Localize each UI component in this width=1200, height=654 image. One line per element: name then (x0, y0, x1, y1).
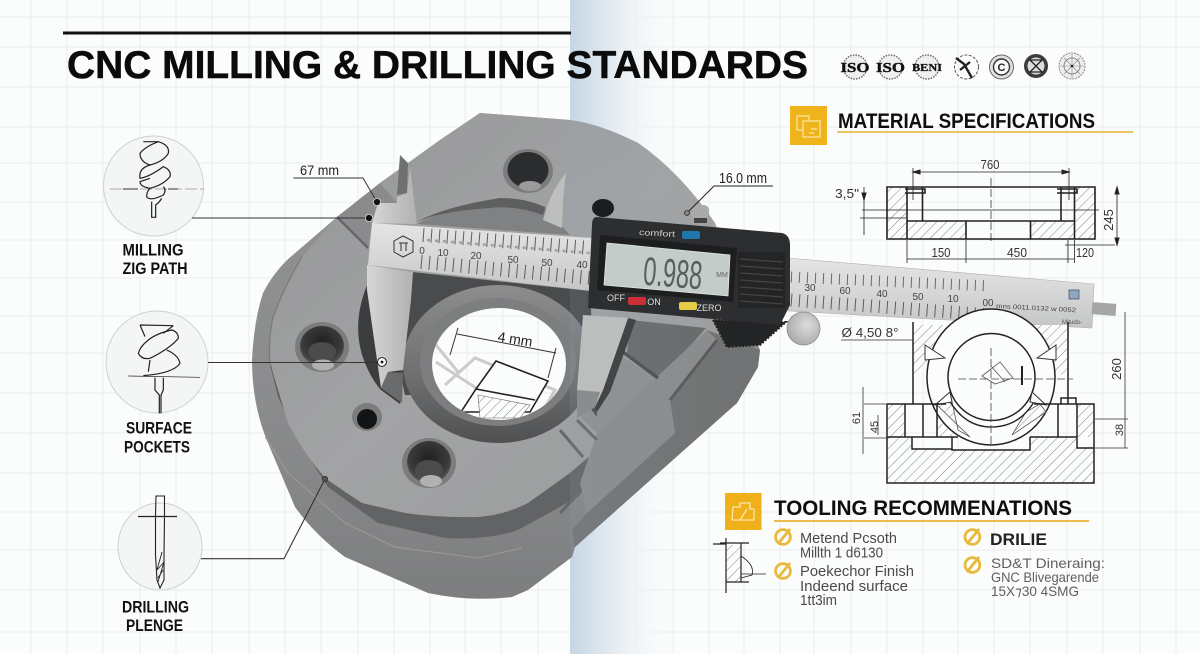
dark screw (592, 199, 614, 217)
small section drawing (713, 538, 766, 593)
dimension: 4 mm: 4 mm (497, 328, 534, 350)
upper fixed jaw (372, 167, 417, 224)
check: drill (965, 529, 980, 544)
surface label: POCKETS (124, 438, 190, 456)
hatched upper block areas (887, 325, 1094, 437)
LCD reading: 0.988 (642, 250, 704, 298)
check: drill spec (965, 557, 980, 572)
scale numbers (419, 246, 994, 309)
milling centerline (110, 188, 204, 190)
scale numbers: 40 (576, 260, 588, 271)
part outer wall (252, 113, 760, 599)
tool text: pocket: Poekechor Finish (800, 564, 914, 580)
drilling illustration circle (118, 503, 202, 590)
operation: milling zig path (104, 136, 373, 278)
callout: 16.0 mm: 16.0 mm (719, 171, 767, 187)
drilling bit icon (138, 496, 177, 588)
hole: left (295, 322, 349, 372)
operation: surface pockets (106, 311, 386, 456)
certification badges (840, 53, 1085, 79)
centerline (990, 178, 992, 241)
title: CNC MILLING & DRILLING STANDARDS (67, 44, 808, 87)
recess floor between jaws (417, 201, 570, 235)
badge: tool seal (954, 55, 978, 79)
right slab (580, 330, 717, 513)
check: milling (776, 529, 790, 544)
right slab slot (670, 340, 717, 400)
callout: 16.0 mm (685, 171, 773, 215)
hole: small (352, 403, 382, 431)
tool text: pocket: 1tt3im (800, 593, 837, 609)
silver thumb screw (691, 205, 709, 223)
dimension labels: 245 (1101, 209, 1116, 231)
section: material specifications (790, 106, 1133, 263)
scale numbers: 60 (839, 286, 851, 297)
milling label: MILLING (122, 242, 184, 260)
tooling heading: TOOLING RECOMMENATIONS (774, 497, 1072, 520)
beam logo (394, 236, 413, 257)
scale numbers: 50 (912, 292, 924, 303)
scale brand print: Mitudo- (1062, 320, 1082, 326)
blue tinted right panel edge (570, 0, 685, 654)
display grille (738, 252, 785, 308)
lower tick marks left (421, 262, 590, 278)
badge: ISO (840, 55, 870, 79)
depth rod (1092, 302, 1116, 316)
dimension labels: 450 (1007, 245, 1027, 260)
scale numbers: 30 (804, 283, 816, 294)
title rule (63, 32, 571, 34)
milling leader (192, 214, 373, 222)
section outlines (887, 187, 1095, 239)
badge: target seal (1059, 53, 1085, 79)
badge: BENI: BENI (912, 62, 942, 74)
upper tick marks left (423, 235, 590, 248)
upper tick marks right (791, 277, 990, 286)
tooling icon (725, 493, 762, 530)
surface illustration circle (106, 311, 208, 413)
material underline (837, 131, 1133, 133)
surface leader (208, 358, 386, 366)
tool text: pocket: Indeend surface (800, 579, 908, 595)
drilling label: PLENGE (126, 617, 183, 635)
dimension lines (860, 168, 1117, 263)
check: pocket (776, 563, 790, 578)
upper dots row left (427, 240, 590, 253)
surface label: SURFACE (126, 420, 192, 438)
operation: drilling plenge (118, 476, 328, 635)
upper moving jaw (543, 173, 566, 228)
scale small print: mns 0011.0132 w 0052 (996, 303, 1077, 314)
badge: ISO: ISO (840, 61, 870, 76)
drill subheading: DRILIE (990, 530, 1047, 549)
yellow button (679, 302, 697, 310)
lower jaw base shade (381, 372, 403, 403)
ring bevel (420, 298, 576, 426)
surface label (124, 420, 192, 456)
drilling label: DRILLING (122, 598, 189, 616)
upper fixed jaw blade (397, 155, 408, 195)
scale numbers: 10 (947, 294, 959, 305)
dark block (400, 272, 597, 417)
tooling underline (774, 520, 1089, 522)
hole: lower (402, 438, 456, 488)
block dimension labels: 45 (869, 421, 881, 433)
milling label (122, 242, 188, 278)
section: tooling recommendations (713, 493, 1105, 609)
tool text: drill spec (991, 555, 1105, 599)
dimension labels: 3,5" (835, 186, 859, 201)
right outer block (572, 330, 760, 547)
scale numbers: 20 (470, 251, 482, 262)
dimension labels: 150 (932, 245, 950, 260)
thumb wheel (787, 312, 820, 345)
right recess floor light (580, 357, 660, 433)
recess arc band (417, 198, 545, 222)
surface drill icon (128, 325, 200, 413)
drilling label (122, 598, 189, 635)
material heading: MATERIAL SPECIFICATIONS (838, 109, 1095, 133)
display bezel (597, 235, 737, 302)
tint over part (570, 289, 634, 546)
digital caliper (367, 155, 1116, 418)
chamfer groove (337, 217, 368, 248)
block dimension labels: Ø 4,50 8° (842, 325, 898, 340)
display body (588, 217, 790, 325)
top section drawing (860, 168, 1119, 263)
badge: X seal (1024, 54, 1048, 78)
block dimension labels: 61 (851, 412, 863, 424)
dimension labels: 760 (980, 157, 1000, 172)
scale numbers: 50 (507, 255, 519, 266)
badge: C seal (990, 55, 1014, 79)
hatched base (887, 437, 1094, 483)
scale numbers: 0 (419, 246, 425, 257)
arrows (862, 170, 1119, 245)
left chamfer facet (337, 183, 397, 248)
diagonal dark bars (560, 420, 597, 513)
tool text: milling (800, 531, 897, 562)
drawing seen through hole (433, 308, 565, 420)
tool text: drill spec: GNC Blivegarende (991, 569, 1099, 585)
block dimension labels (842, 325, 1126, 436)
top face (269, 113, 740, 517)
lower moving jaw edge (595, 318, 636, 412)
milling drill icon (140, 142, 170, 217)
dimension labels (835, 157, 1116, 260)
LCD screen (604, 243, 730, 296)
ring (403, 285, 593, 443)
zero label: ZERO (696, 303, 722, 313)
hatched section (887, 187, 1095, 239)
tool text: drill spec: SD&T Dineraing: (991, 555, 1105, 571)
tool text: milling: Metend Pcsoth (800, 531, 897, 547)
block dimension labels: 38 (1114, 424, 1126, 436)
left column: operations (104, 136, 386, 635)
scale numbers: 10 (437, 248, 449, 259)
lower moving jaw (577, 315, 628, 418)
badge: BENI (912, 55, 942, 79)
scale brand mark (1069, 290, 1079, 299)
block outlines (887, 398, 1094, 483)
badge: ISO second: ISO (876, 61, 905, 76)
block dimension labels: 260 (1109, 358, 1124, 380)
callout: 67 mm (294, 162, 381, 206)
display brand: comfort (639, 227, 676, 239)
main scale beam right (788, 258, 1094, 328)
through hole (432, 308, 566, 420)
right slab dark bar (623, 352, 658, 378)
on label: ON (647, 297, 661, 307)
dark recess left of lower jaw (358, 283, 410, 404)
bearing housing (913, 309, 1073, 445)
callout: 67 mm: 67 mm (300, 162, 339, 178)
milling label: ZIG PATH (122, 260, 188, 278)
tool text: pocket (800, 564, 914, 609)
center ring with through-hole (400, 272, 597, 443)
scale numbers: 00 (982, 298, 994, 309)
material icon (790, 106, 827, 145)
off label: OFF (607, 293, 625, 303)
scale numbers: 50 (541, 258, 553, 269)
red button (628, 297, 646, 305)
drilling leader (201, 476, 328, 559)
lower moving jaw foot (577, 390, 600, 418)
lower fixed jaw (367, 265, 413, 388)
right recess floor dark (627, 320, 706, 380)
knurled drive (713, 320, 786, 347)
blue button (682, 231, 700, 239)
lower tick marks right (791, 300, 990, 315)
tool text: milling: Millth 1 d6130 (800, 546, 883, 562)
hole: upper (503, 149, 553, 193)
dark step band (270, 365, 600, 538)
badge: ISO second (876, 55, 905, 79)
left rim edge line (269, 257, 302, 365)
bearing block drawing (841, 309, 1128, 483)
tool text: drill spec: 15X⁊30 4SMG (991, 583, 1079, 599)
scale numbers: 40 (876, 289, 888, 300)
highlight edge on lower wall (265, 437, 522, 558)
milling illustration circle (104, 136, 204, 236)
badge: C seal: C (998, 62, 1006, 74)
dimension labels: 120 (1076, 245, 1094, 260)
main scale beam left (368, 223, 592, 291)
LCD unit: MM (716, 272, 728, 279)
block dimension lines (841, 312, 1128, 454)
machined metal part (252, 113, 760, 599)
